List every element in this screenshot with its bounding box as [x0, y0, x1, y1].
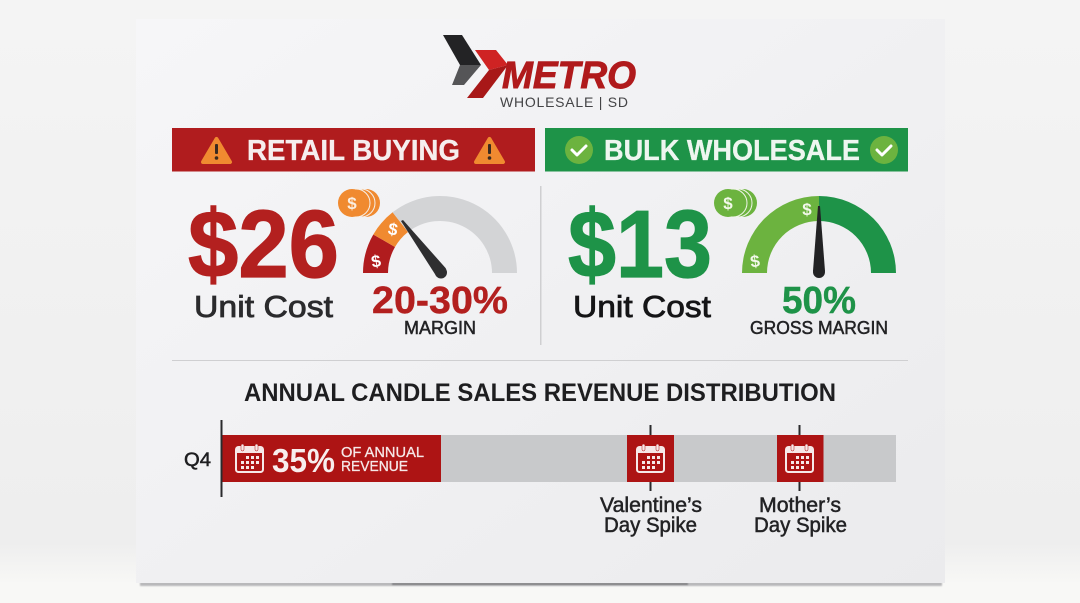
- retail price: $26: [188, 191, 339, 298]
- icon: warning right: [476, 139, 503, 162]
- wholesale unit cost label: Unit Cost: [573, 289, 711, 324]
- icon: red chevron: [467, 50, 508, 98]
- axis line: [220, 420, 222, 497]
- wholesale margin label: GROSS MARGIN: [750, 318, 888, 338]
- icon: green coins: $: [723, 194, 733, 213]
- icon: dark chevron: [443, 35, 481, 85]
- retail margin value: 20-30%: [372, 280, 508, 322]
- q4 caption: [341, 444, 424, 475]
- heading: retail buying: RETAIL BUYING: [247, 135, 460, 167]
- q4 percentage: 35%: [272, 442, 335, 479]
- panel: retail header: [172, 128, 535, 172]
- marker: mother's day: [754, 425, 847, 537]
- mother's label: Day Spike: [754, 514, 847, 537]
- icon: calendar: [637, 444, 664, 472]
- wholesale gauge: $: [749, 251, 762, 272]
- mother's label: [754, 494, 847, 537]
- valentine's label: Valentine’s: [600, 494, 702, 517]
- retail unit cost label: Unit Cost: [194, 289, 333, 324]
- icon: check right: [870, 136, 898, 164]
- logo subtitle: WHOLESALE | SD: [500, 94, 628, 110]
- valentine's label: [600, 494, 702, 537]
- marker: valentine's day: [600, 425, 702, 537]
- icon: green coins: [714, 189, 757, 217]
- logo wordmark: METRO: [502, 55, 636, 97]
- panel: retail stats: [188, 189, 517, 338]
- wholesale gauge: $: [802, 200, 812, 219]
- wholesale price: $13: [568, 191, 712, 298]
- q4 caption: OF ANNUAL: [341, 444, 424, 461]
- retail margin label: MARGIN: [404, 318, 476, 338]
- icon: calendar: [236, 444, 263, 472]
- card shadow: [140, 582, 942, 586]
- icon: orange coins: [338, 189, 380, 217]
- logo: [443, 35, 636, 110]
- heading: revenue distribution: ANNUAL CANDLE SALES REVENUE DISTRIBUTION: [244, 379, 836, 407]
- valentine's label: Day Spike: [604, 514, 697, 537]
- mother's label: Mother’s: [759, 494, 841, 517]
- wholesale margin value: 50%: [782, 280, 856, 322]
- retail gauge: [363, 196, 517, 278]
- gauge needle: [401, 220, 447, 278]
- retail gauge: $: [370, 251, 383, 272]
- gauge needle: [813, 206, 825, 278]
- q4 bar: [221, 435, 441, 482]
- wholesale gauge: [742, 196, 896, 278]
- panel: card: [136, 19, 945, 583]
- icon: check left: [565, 136, 593, 164]
- q4 label: Q4: [184, 450, 211, 471]
- retail gauge: $: [387, 219, 400, 240]
- panel: wholesale stats: [568, 189, 896, 338]
- icon: warning left: [203, 139, 230, 162]
- heading: bulk wholesale: BULK WHOLESALE: [604, 135, 860, 167]
- chart: revenue timeline: [184, 420, 896, 537]
- q4 caption: REVENUE: [341, 458, 408, 475]
- timeline track: [221, 435, 896, 482]
- icon: orange coins: $: [347, 194, 357, 213]
- icon: calendar: [786, 444, 813, 472]
- panel: wholesale header: [545, 128, 908, 172]
